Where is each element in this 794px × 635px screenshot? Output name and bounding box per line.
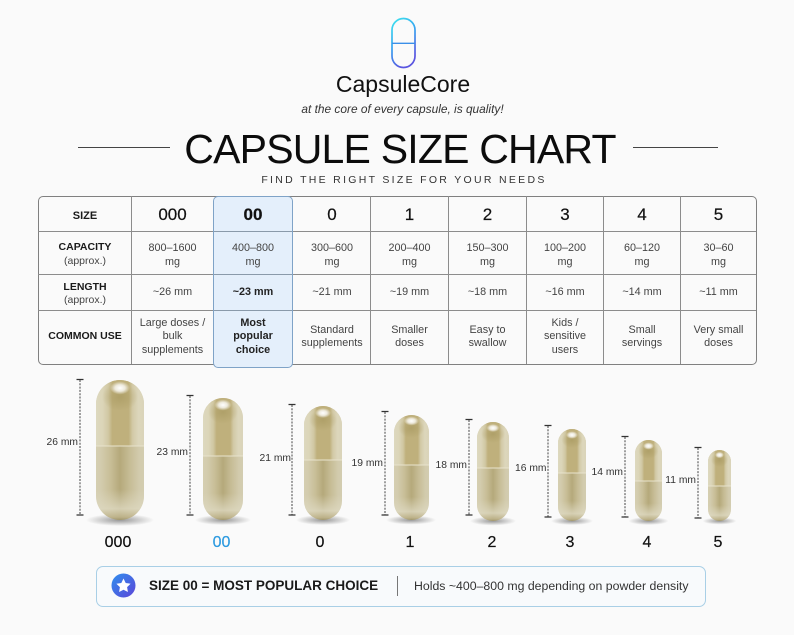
capsule 00 with 23 mm dimension: 23 mm <box>157 447 188 458</box>
size table: 100–200 <box>544 242 586 254</box>
row: capacity <box>58 241 112 266</box>
capsule 0 with 21 mm dimension <box>260 404 350 525</box>
capsule 1 with 19 mm dimension: 19 mm <box>352 458 383 469</box>
size table: ~21 mm <box>312 286 352 298</box>
size table: popular <box>233 330 273 342</box>
size table: 200–400 <box>388 242 431 254</box>
size table: 1 <box>405 205 414 224</box>
row: common use: COMMON USE <box>48 330 122 342</box>
capsule 2 with 18 mm dimension: 18 mm <box>436 460 467 471</box>
size table: mg <box>634 256 650 268</box>
row: capacity: CAPACITY <box>59 241 111 253</box>
size labels: 000 <box>105 534 131 551</box>
row: length <box>63 280 107 306</box>
size table: mg <box>402 256 417 268</box>
tagline: at the core of every capsule, is quality! <box>301 102 504 116</box>
size table: users <box>552 344 578 356</box>
size labels: 3 <box>566 534 575 551</box>
capsule 1 with 19 mm dimension <box>352 412 436 524</box>
size table: Kids / <box>551 317 578 329</box>
highlighted column 00 <box>213 196 293 368</box>
size table: 60–120 <box>624 242 660 254</box>
capsule 3 with 16 mm dimension: 16 mm <box>515 463 546 474</box>
icon: star badge <box>112 574 136 598</box>
size table: supplements <box>142 344 203 356</box>
size table: mg <box>480 256 495 268</box>
size labels: 5 <box>714 534 723 551</box>
capsule 4 with 14 mm dimension <box>592 436 668 525</box>
capsule 000 with 26 mm dimension: 26 mm <box>47 437 78 448</box>
size table: Most <box>240 317 266 329</box>
logo icon: capsule outline <box>391 18 416 68</box>
size table: 800–1600 <box>148 242 197 254</box>
size table: ~23 mm <box>233 286 273 298</box>
capsule 0 with 21 mm dimension: 21 mm <box>260 453 291 464</box>
size table: supplements <box>301 337 363 349</box>
size table: 00 <box>244 205 262 224</box>
size table: 3 <box>560 205 570 224</box>
size table: Very small <box>694 324 743 336</box>
capsule 000 with 26 mm dimension <box>47 380 154 526</box>
size table: 150–300 <box>466 242 509 254</box>
row: length: (approx.) <box>64 294 106 306</box>
size labels: 4 <box>643 534 652 551</box>
size table: 300–600 <box>311 242 353 254</box>
size table: ~14 mm <box>622 286 662 298</box>
size labels: 1 <box>406 534 415 551</box>
size table: 4 <box>637 205 647 224</box>
capsule 00 with 23 mm dimension <box>157 396 251 525</box>
size table: Standard <box>310 324 354 336</box>
size table: Easy to <box>469 324 506 336</box>
capsule 5 with 11 mm dimension: 11 mm <box>665 475 696 486</box>
callout heading: SIZE 00 = MOST POPULAR CHOICE <box>149 578 378 593</box>
size table: mg <box>245 256 260 268</box>
row: length: LENGTH <box>63 280 107 292</box>
title: CAPSULE SIZE CHART <box>184 126 616 172</box>
size table: mg <box>711 256 726 268</box>
size labels <box>105 534 723 551</box>
size table: doses <box>704 337 733 349</box>
size table: ~19 mm <box>390 286 429 298</box>
capsule 5 with 11 mm dimension <box>665 448 736 524</box>
size table: 000 <box>158 205 187 224</box>
row: size: SIZE <box>73 210 97 222</box>
size table: 2 <box>483 205 492 224</box>
capsule 2 with 18 mm dimension <box>436 420 516 526</box>
size table: Smaller <box>391 324 428 336</box>
callout: most popular choice <box>96 566 706 607</box>
size table: ~18 mm <box>468 286 507 298</box>
size table: ~16 mm <box>545 286 585 298</box>
size labels: 0 <box>316 534 325 551</box>
size table: bulk <box>163 330 182 342</box>
capsule 4 with 14 mm dimension: 14 mm <box>592 467 623 478</box>
size table: mg <box>324 256 339 268</box>
size table: mg <box>165 256 180 268</box>
size table: 5 <box>714 205 723 224</box>
size table: swallow <box>469 337 506 349</box>
size table: choice <box>236 344 270 356</box>
capsule 3 with 16 mm dimension <box>515 426 593 525</box>
size table: 0 <box>327 205 337 224</box>
brand name: CapsuleCore <box>336 71 470 97</box>
size table: Small <box>628 324 656 336</box>
size table: doses <box>395 337 424 349</box>
size labels: 00 <box>213 534 230 551</box>
size table <box>38 196 757 368</box>
callout detail: Holds ~400–800 mg depending on powder density <box>414 579 688 593</box>
size labels: 2 <box>488 534 497 551</box>
subtitle: FIND THE RIGHT SIZE FOR YOUR NEEDS <box>261 174 547 186</box>
size table: ~11 mm <box>699 286 738 298</box>
size table: mg <box>557 256 572 268</box>
capsule comparison chart <box>47 378 735 551</box>
size table: servings <box>622 337 662 349</box>
size table: 30–60 <box>703 242 734 254</box>
size table: sensitive <box>544 330 586 342</box>
size table: 400–800 <box>232 242 274 254</box>
size table: ~26 mm <box>153 286 192 298</box>
row: capacity: (approx.) <box>64 254 106 266</box>
size table: Large doses / <box>140 317 205 329</box>
